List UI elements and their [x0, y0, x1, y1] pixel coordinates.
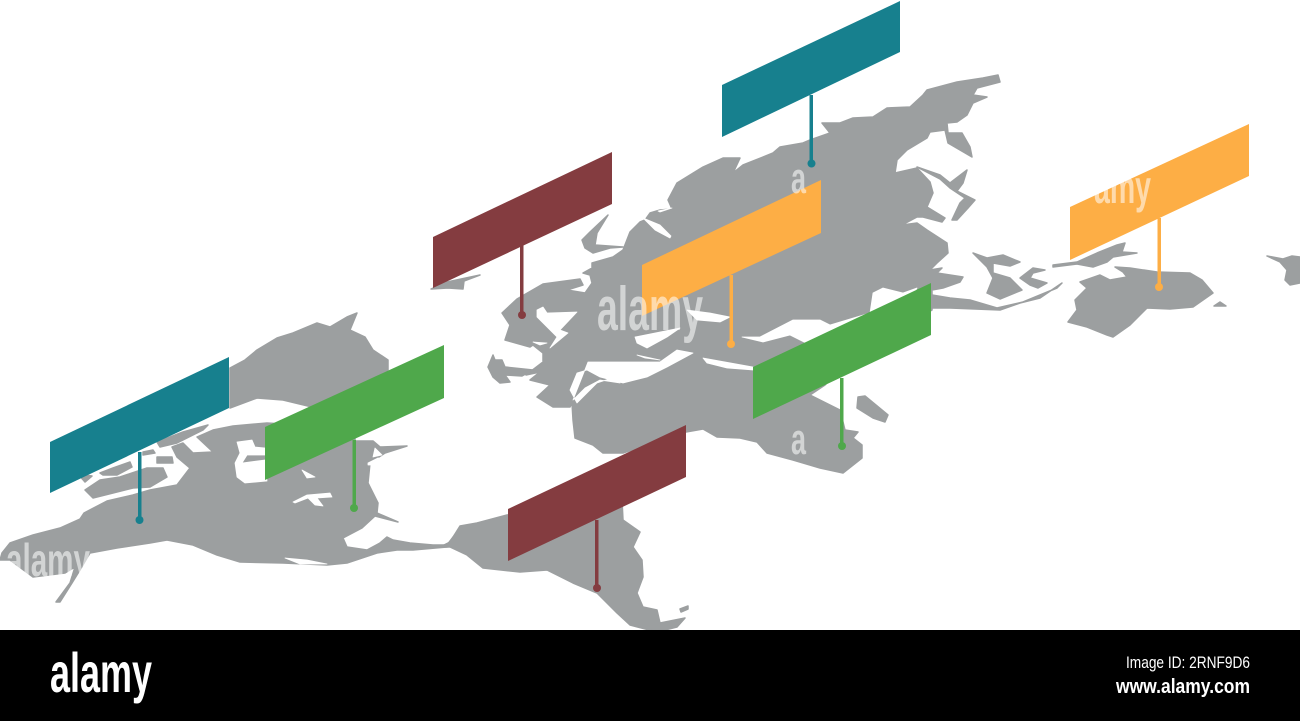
- watermark: letter south: a: [791, 415, 806, 464]
- watermark: center: alamy: [597, 275, 703, 344]
- watermark: left: alamy: [6, 534, 90, 586]
- landmass: Japan and Sakhalin: [917, 167, 975, 220]
- watermark: letter north: a: [791, 154, 806, 203]
- image id: Image ID: 2RNF9D6: [1126, 653, 1250, 672]
- landmass: South America: [440, 500, 685, 632]
- landmass: small island under maroon callout: [431, 275, 480, 289]
- Eurasia inland seas: [533, 208, 917, 403]
- footer bar: [0, 630, 1300, 721]
- landmass: northern island arc: [582, 215, 623, 253]
- landmass: Falkland islands: [680, 606, 688, 612]
- website: www.alamy.com: [1115, 676, 1250, 698]
- footer logo: alamy: [50, 641, 152, 704]
- landmass: New Zealand: [1267, 256, 1300, 285]
- callout: green west: [265, 345, 444, 512]
- callout: teal west: [50, 357, 229, 524]
- landmass: Australia: [1068, 267, 1213, 337]
- landmass: Eurasia and Africa: [502, 75, 1000, 473]
- North America inland waters: [235, 440, 388, 564]
- callout: green east: [753, 283, 931, 450]
- landmass: North America: [0, 423, 460, 602]
- callout: yellow center: [642, 180, 821, 348]
- callout: maroon upper: [433, 152, 612, 319]
- landmass: Tasmania: [1214, 302, 1226, 306]
- arctic islands: [78, 425, 208, 498]
- watermark: east: amy: [1094, 161, 1151, 213]
- callout: yellow east: [1070, 124, 1249, 291]
- callout: teal north: [722, 1, 900, 168]
- landmass: western European isles: [488, 355, 533, 383]
- landmass: Greenland: [230, 313, 388, 408]
- callout: maroon south: [508, 425, 686, 592]
- landmass: Southeast Asia islands: [932, 243, 1137, 310]
- world map: [0, 75, 1300, 632]
- landmass: Madagascar: [857, 396, 888, 422]
